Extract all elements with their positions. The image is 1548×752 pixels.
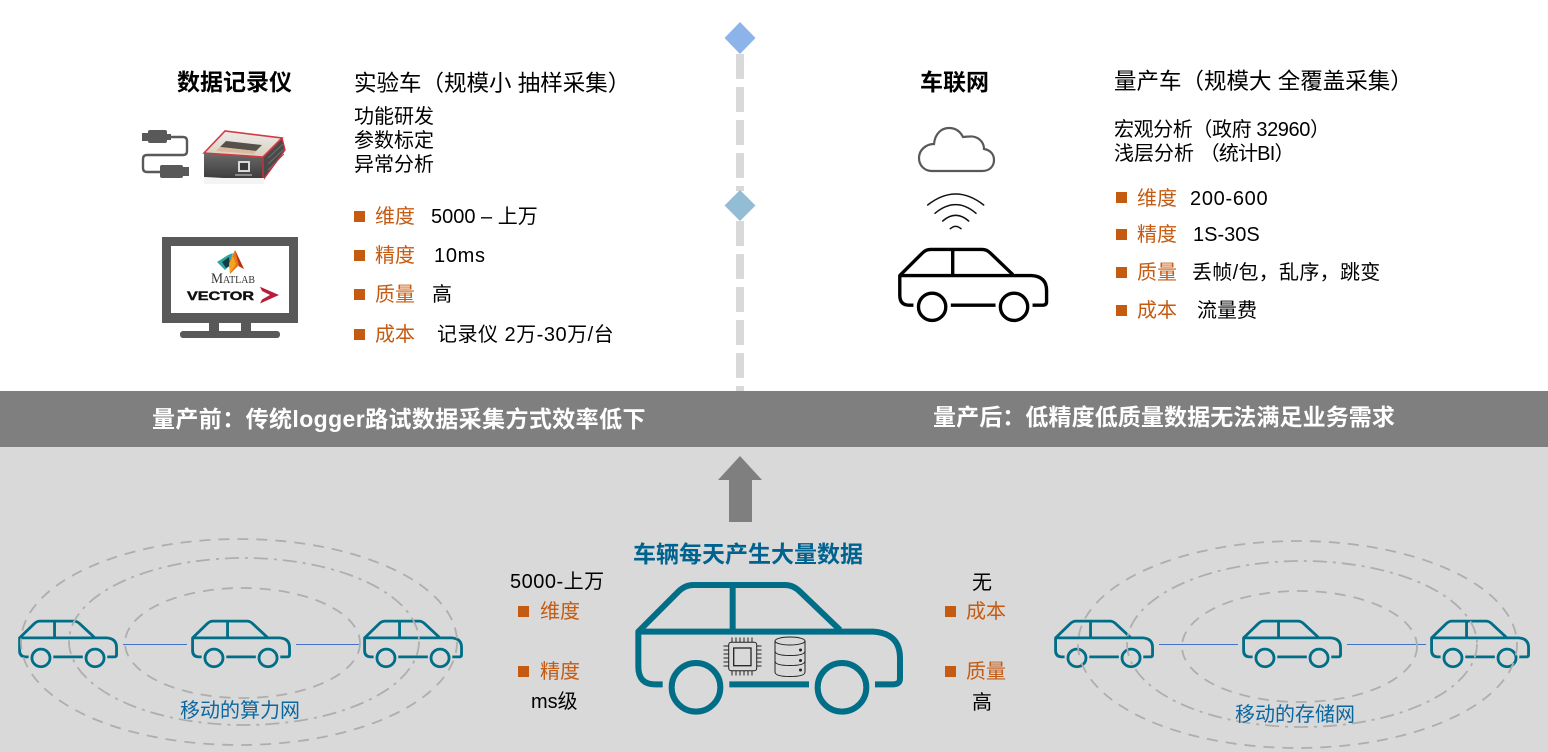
heading: test vehicle: 实验车（规模小 抽样采集） — [354, 70, 630, 96]
label: mobile storage network: 移动的存储网 — [1235, 704, 1355, 726]
heading: vehicle data: 车辆每天产生大量数据 — [633, 541, 863, 567]
icon: wireless signal — [928, 194, 984, 229]
timeline diamond: top — [724, 22, 756, 54]
list: production vehicle metrics: 维度 — [1137, 188, 1177, 210]
icon: connected car — [900, 249, 1047, 320]
icon: monitor: VECTOR — [187, 289, 254, 303]
timeline diamond: middle — [724, 190, 756, 221]
list: production vehicle metrics: 成本 — [1137, 300, 1177, 322]
left metrics: dimension and precision — [510, 570, 605, 712]
list: production vehicle metrics — [1116, 188, 1381, 322]
text: production vehicle uses — [1114, 118, 1330, 164]
list: test vehicle metrics: 质量 — [375, 284, 415, 306]
text: test vehicle uses: 参数标定 — [354, 130, 434, 152]
storage network diagram — [1056, 541, 1529, 748]
text: test vehicle uses: 异常分析 — [354, 154, 434, 176]
list: test vehicle metrics: 维度 — [375, 206, 415, 228]
banner text: after mass production: 量产后：低精度低质量数据无法满足业务需求 — [933, 404, 1395, 430]
list: production vehicle metrics: 1S-30S — [1193, 224, 1260, 246]
right metrics: cost and quality — [945, 572, 1006, 714]
label: mobile computing network: 移动的算力网 — [180, 700, 300, 722]
list: production vehicle metrics: 精度 — [1137, 224, 1177, 246]
list: test vehicle metrics: 高 — [432, 284, 452, 306]
icon: database — [775, 637, 805, 676]
bottom grey background — [0, 447, 1548, 752]
upward arrow — [718, 456, 762, 522]
list: test vehicle metrics: 成本 — [375, 324, 415, 346]
icon: data logger device — [204, 131, 285, 184]
left metrics: dimension and precision: ms级 — [531, 690, 578, 712]
timeline: dashed vertical line — [736, 54, 744, 391]
heading: production vehicle: 量产车（规模大 全覆盖采集） — [1114, 69, 1413, 94]
list: production vehicle metrics: 流量费 — [1197, 300, 1257, 322]
list: test vehicle metrics: 10ms — [434, 244, 486, 266]
left metrics: dimension and precision: 精度 — [540, 660, 580, 682]
right metrics: cost and quality: 成本 — [966, 600, 1006, 622]
text: test vehicle uses — [354, 106, 434, 176]
text: test vehicle uses: 功能研发 — [354, 106, 434, 128]
list: production vehicle metrics: 200-600 — [1190, 188, 1268, 210]
heading: connected vehicles: 车联网 — [920, 69, 989, 95]
left metrics: dimension and precision: 5000-上万 — [510, 570, 605, 592]
list: test vehicle metrics: 5000 – 上万 — [431, 206, 538, 228]
text: production vehicle uses: 浅层分析 （统计BI） — [1114, 142, 1294, 164]
heading: data logger: 数据记录仪 — [177, 69, 292, 95]
right metrics: cost and quality: 质量 — [966, 660, 1006, 682]
right metrics: cost and quality: 高 — [972, 692, 992, 714]
banner text: before mass production: 量产前：传统logger路试数据采集方式效率低下 — [152, 406, 646, 432]
grey banner — [0, 391, 1548, 447]
list: production vehicle metrics: 丢帧/包，乱序，跳变 — [1192, 262, 1381, 284]
icon: chip — [724, 638, 762, 676]
right metrics: cost and quality: 无 — [972, 572, 992, 594]
list: test vehicle metrics: 精度 — [375, 244, 415, 266]
computing network diagram — [20, 539, 462, 745]
icon: USB cable — [142, 130, 189, 178]
left metrics: dimension and precision: 维度 — [540, 600, 580, 622]
list: test vehicle metrics — [354, 206, 614, 346]
icon: monitor: Matlab — [211, 271, 255, 287]
icon: cloud — [919, 128, 994, 171]
list: test vehicle metrics: 记录仪 2万-30万/台 — [437, 324, 614, 346]
list: production vehicle metrics: 质量 — [1137, 262, 1177, 284]
text: production vehicle uses: 宏观分析（政府 32960） — [1114, 118, 1330, 140]
icon: monitor — [162, 237, 298, 338]
main vehicle illustration — [638, 585, 900, 712]
